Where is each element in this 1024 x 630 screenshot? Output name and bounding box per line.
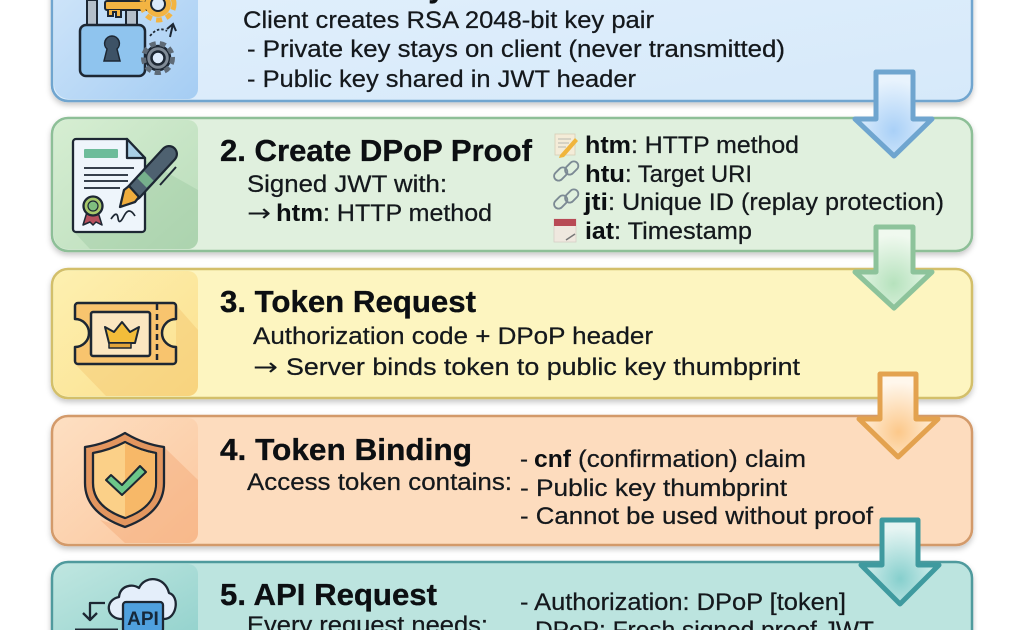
list: proof claims: : Unique ID (replay protection) bbox=[608, 189, 944, 216]
icon tile: panel 4 bbox=[54, 418, 198, 543]
arrow: step 3 to 4 bbox=[859, 374, 938, 457]
icon: padlock, key and gears bbox=[80, 0, 176, 76]
text: panel 4 list: - bbox=[520, 446, 528, 473]
panel 4: token binding bbox=[52, 416, 972, 545]
text: panel 1 body: Client creates RSA 2048-bit key pair bbox=[243, 7, 654, 34]
text: panel 2 left body: Signed JWT with: bbox=[247, 171, 447, 198]
tile shadow: panel 2 bbox=[74, 160, 198, 249]
icon: ticket with crown bbox=[75, 303, 176, 364]
arrow: step 1 to 2 bbox=[855, 72, 932, 156]
text: panel 2 left body: htm bbox=[276, 200, 323, 227]
text: panel 3 body: Server binds token to public key thumbprint bbox=[286, 354, 800, 381]
text: panel 4 list: (confirmation) claim bbox=[578, 446, 806, 473]
icon: memo bbox=[555, 134, 578, 158]
text: panel 1 body: - Private key stays on client (never transmitted) bbox=[247, 36, 785, 63]
tile shadow: panel 4 bbox=[100, 447, 198, 543]
text: panel 4 list: - Public key thumbprint bbox=[520, 475, 787, 502]
panel 3: token request bbox=[52, 269, 972, 398]
text: panel 2 left body: : HTTP method bbox=[323, 200, 492, 227]
arrow: step 2 to 3 bbox=[855, 227, 932, 308]
icon: API cloud bbox=[75, 579, 176, 630]
list: proof claims bbox=[552, 132, 944, 245]
list: proof claims: : HTTP method bbox=[631, 132, 799, 159]
icon: link bbox=[552, 188, 580, 210]
icon tile: panel 1 bbox=[54, 0, 198, 99]
icon tile: panel 5 bbox=[54, 564, 198, 630]
icon: signed document and pen bbox=[73, 139, 176, 232]
tile shadow: panel 3 bbox=[75, 305, 198, 396]
icon: link bbox=[552, 160, 580, 182]
icon: API cloud: API bbox=[127, 609, 159, 630]
text: panel 2 heading: 2. Create DPoP Proof bbox=[220, 133, 533, 168]
text: panel 5 heading: 5. API Request bbox=[220, 577, 437, 612]
icon tile: panel 3 bbox=[54, 271, 198, 396]
text: panel 5 list: - Authorization: DPoP [token] bbox=[520, 589, 846, 616]
text: panel 4 heading: 4. Token Binding bbox=[220, 432, 472, 467]
icon tile: panel 2 bbox=[54, 120, 198, 249]
panel 2: create DPoP proof bbox=[52, 118, 972, 251]
text: panel 4 list: cnf bbox=[534, 446, 572, 473]
list: proof claims: htm bbox=[585, 132, 631, 159]
list: proof claims: iat bbox=[585, 218, 614, 245]
text: panel 1 body bbox=[243, 7, 785, 93]
text: panel 3 body: → bbox=[253, 353, 278, 381]
list: proof claims: : Timestamp bbox=[614, 218, 752, 245]
list: proof claims: jti bbox=[583, 189, 608, 216]
text: panel 4 left body: Access token contains: bbox=[247, 469, 512, 496]
text: panel 5 list bbox=[520, 589, 874, 630]
text: panel 1 body: - Public key shared in JWT header bbox=[247, 66, 636, 93]
arrow: step 4 to 5 bbox=[861, 520, 939, 604]
list: proof claims: htu bbox=[585, 161, 625, 188]
text: panel 4 list bbox=[520, 446, 873, 530]
text: panel 3 body bbox=[253, 323, 800, 381]
icon: shield with check bbox=[85, 433, 164, 527]
panel 5: API request bbox=[52, 562, 972, 630]
icon: calendar bbox=[554, 219, 576, 242]
list: proof claims: : Target URI bbox=[625, 161, 752, 188]
text: panel 4 list: - Cannot be used without proof bbox=[520, 503, 873, 530]
text: panel 2 left body bbox=[247, 171, 492, 227]
panel 1: generate key pair bbox=[52, 0, 972, 101]
text: panel 2 left body: → bbox=[247, 199, 271, 227]
text: panel 3 heading: 3. Token Request bbox=[220, 284, 476, 319]
text: panel 3 body: Authorization code + DPoP header bbox=[253, 323, 653, 350]
